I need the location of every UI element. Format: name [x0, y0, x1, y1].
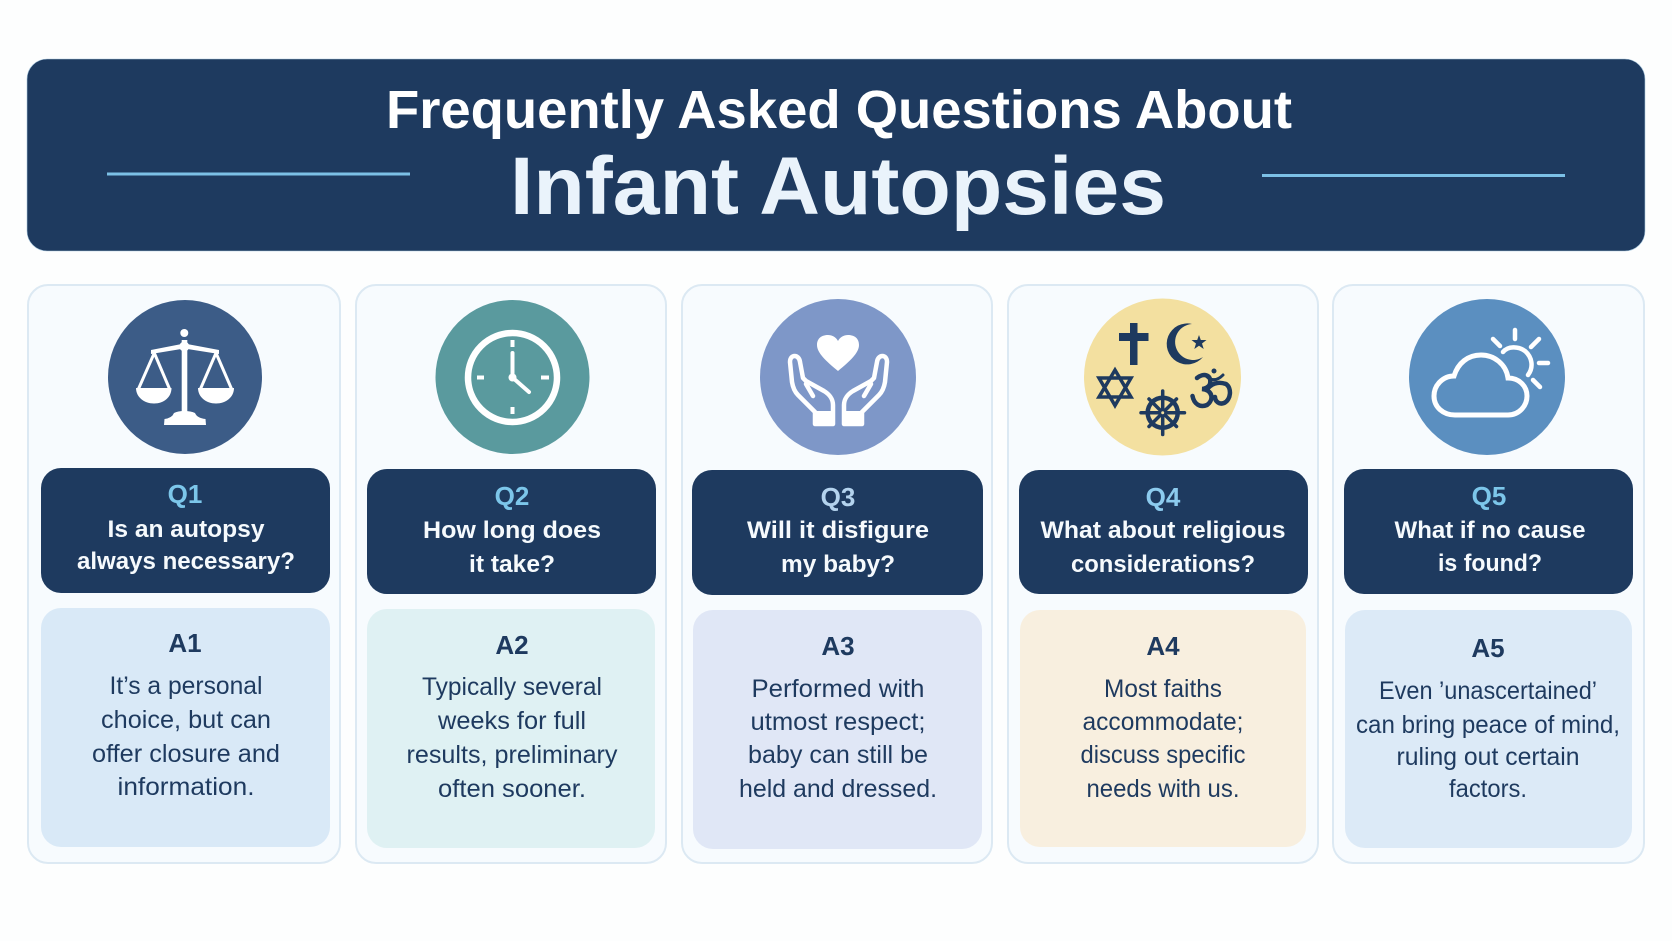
- question box Q1: [41, 468, 330, 593]
- question box Q3: [692, 470, 983, 595]
- icon: star of David: [1099, 370, 1131, 406]
- question box Q4: considerations?: [1071, 551, 1255, 578]
- panel: Q1: [28, 285, 340, 863]
- answer box A3: A3: [821, 631, 855, 661]
- question box Q1: Is an autopsy: [108, 516, 265, 543]
- icon: clock: [436, 300, 590, 454]
- question box Q4: What about religious: [1040, 517, 1286, 544]
- answer box A4: accommodate;: [1082, 708, 1244, 736]
- question box Q1: always necessary?: [77, 548, 295, 575]
- answer box A1: offer closure and: [92, 740, 280, 768]
- answer box A2: often sooner.: [438, 775, 586, 803]
- answer box A1: choice, but can: [101, 706, 271, 734]
- title line 2: Infant Autopsies: [510, 141, 1166, 232]
- question box Q2: How long does: [423, 517, 601, 544]
- answer box A4: Most faiths: [1104, 675, 1222, 703]
- icon: hands holding heart: [760, 299, 916, 455]
- question box Q5: Q5: [1472, 481, 1506, 511]
- icon: om symbol: [1192, 368, 1230, 406]
- answer box A4: discuss specific: [1080, 741, 1246, 769]
- answer box A3: [693, 610, 982, 849]
- question box Q5: [1344, 469, 1633, 594]
- answer box A5: [1345, 610, 1632, 848]
- icon: balance scales: [108, 300, 262, 454]
- answer box A5: ruling out certain: [1396, 743, 1580, 771]
- question box Q3: Q3: [821, 482, 855, 512]
- icon: crescent and star: [1167, 323, 1206, 364]
- icon: cloud and sun: [1409, 299, 1565, 455]
- answer box A2: A2: [495, 630, 529, 660]
- question box Q2: Q2: [495, 481, 529, 511]
- answer box A2: results, preliminary: [406, 741, 618, 769]
- question box Q2: it take?: [469, 551, 555, 578]
- question box Q4: Q4: [1146, 482, 1181, 512]
- panel: Q3: [682, 285, 992, 863]
- question box Q1: Q1: [168, 479, 202, 509]
- title line 1: Frequently Asked Questions About: [386, 80, 1292, 140]
- question box Q5: What if no cause: [1394, 517, 1586, 544]
- answer box A1: [41, 608, 330, 847]
- answer box A4: A4: [1146, 631, 1180, 661]
- answer box A1: It’s a personal: [110, 672, 262, 700]
- answer box A2: Typically several: [422, 673, 602, 701]
- icon: religious symbols: [1084, 298, 1241, 456]
- answer box A5: A5: [1471, 633, 1505, 663]
- answer box A2: [367, 609, 655, 848]
- icon: cross: [1119, 323, 1148, 365]
- question box Q3: my baby?: [781, 551, 895, 578]
- answer box A3: held and dressed.: [739, 775, 937, 803]
- answer box A4: [1020, 610, 1306, 847]
- panel: Q4: [1008, 285, 1318, 863]
- panel: Q2: [356, 285, 666, 863]
- answer box A4: needs with us.: [1086, 775, 1240, 803]
- answer box A2: weeks for full: [437, 707, 586, 735]
- answer box A3: Performed with: [752, 675, 924, 703]
- question box Q3: Will it disfigure: [747, 517, 929, 544]
- answer box A5: can bring peace of mind,: [1356, 711, 1620, 739]
- answer box A5: factors.: [1449, 775, 1527, 803]
- answer box A1: information.: [118, 773, 254, 801]
- header banner: [27, 59, 1645, 251]
- answer box A3: utmost respect;: [750, 708, 926, 736]
- question box Q5: is found?: [1438, 550, 1542, 577]
- icon: dharma wheel: [1141, 391, 1184, 434]
- answer box A3: baby can still be: [748, 741, 928, 769]
- question box Q2: [367, 469, 656, 594]
- question box Q4: [1019, 470, 1308, 594]
- answer box A5: Even ’unascertained’: [1379, 677, 1597, 705]
- answer box A1: A1: [168, 628, 202, 658]
- panel: Q5: [1333, 285, 1644, 863]
